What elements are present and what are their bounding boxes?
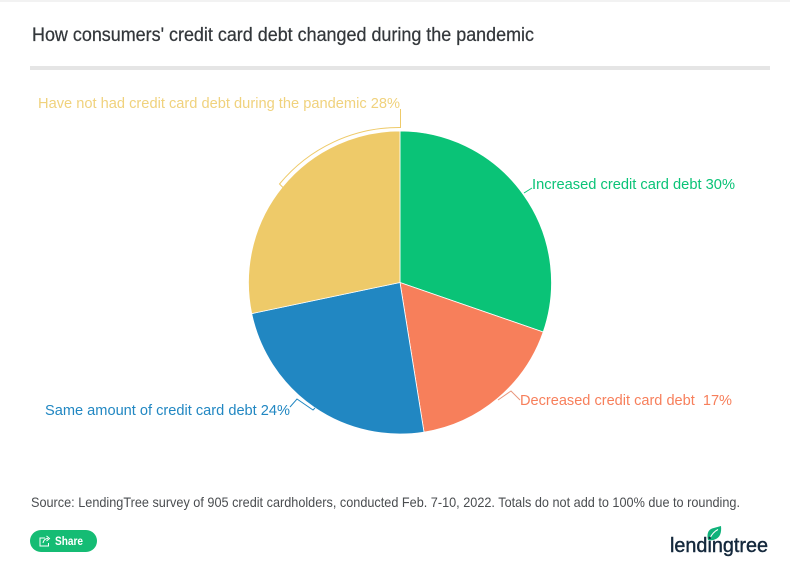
share button <box>30 530 97 552</box>
label: increased: Increased credit card debt 30% <box>532 176 735 193</box>
label: have not had debt: Have not had credit card debt during the pandemic 28% <box>38 95 400 112</box>
pie chart <box>248 131 552 434</box>
label: have not had debt <box>38 95 400 188</box>
lendingtree logo: lendingtree <box>670 534 768 557</box>
slice: increased 30% <box>400 131 552 332</box>
icon: share <box>40 536 50 546</box>
slice: have not had debt 28% <box>248 131 400 314</box>
share button: Share <box>55 536 83 548</box>
slice: same amount 24% <box>252 282 424 434</box>
title: How consumers' credit card debt changed during the pandemic <box>32 24 534 46</box>
icon: leaf <box>708 526 721 540</box>
label: decreased: Decreased credit card debt 17% <box>520 392 732 409</box>
slice: decreased 17% <box>400 282 543 432</box>
label: same amount: Same amount of credit card debt 24% <box>45 402 290 419</box>
